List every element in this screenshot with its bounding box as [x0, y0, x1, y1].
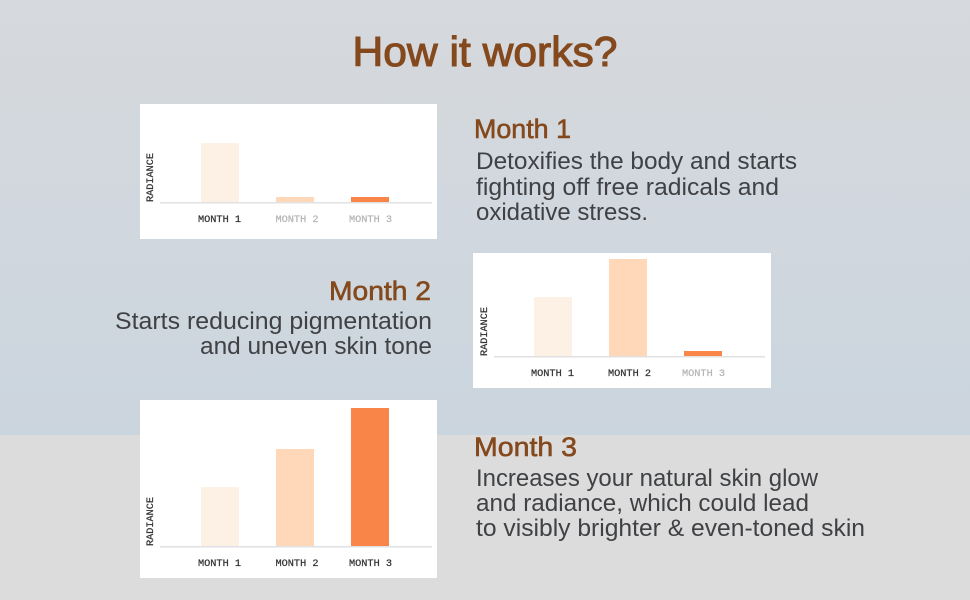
- month labels: [531, 369, 725, 380]
- month labels: MONTH 2: [608, 369, 651, 380]
- bars: [201, 143, 389, 202]
- description: to visibly brighter & even-toned skin: [476, 515, 865, 542]
- description: Increases your natural skin glow: [476, 465, 819, 492]
- month labels: [198, 215, 392, 226]
- month labels: MONTH 1: [531, 369, 574, 380]
- description: Starts reducing pigmentation: [115, 308, 432, 335]
- description: [476, 465, 865, 542]
- month labels: [198, 559, 392, 570]
- description: fighting off free radicals and: [476, 174, 779, 201]
- heading: Month 2: [329, 276, 431, 306]
- heading: Month 3: [474, 432, 577, 462]
- heading: Month 1: [474, 114, 571, 144]
- text block: month 2: [115, 276, 432, 360]
- axis label: RADIANCE: [146, 153, 157, 202]
- month labels: MONTH 1: [198, 215, 241, 226]
- month labels: MONTH 3: [682, 369, 725, 380]
- background: upper blue-grey band: [0, 0, 970, 435]
- text block: month 1: [474, 114, 797, 226]
- month labels: MONTH 3: [349, 559, 392, 570]
- description: [476, 148, 797, 226]
- month labels: MONTH 1: [198, 559, 241, 570]
- description: and uneven skin tone: [200, 333, 432, 360]
- description: oxidative stress.: [476, 199, 648, 226]
- panel: month 2 chart: [473, 253, 771, 388]
- axis label: RADIANCE: [146, 497, 157, 546]
- panel: month 1 chart: [140, 104, 437, 239]
- description: and radiance, which could lead: [476, 490, 809, 517]
- axis label: RADIANCE: [480, 307, 491, 356]
- description: Detoxifies the body and starts: [476, 148, 797, 175]
- bars: [534, 259, 722, 356]
- bars: [201, 408, 389, 546]
- month labels: MONTH 3: [349, 215, 392, 226]
- title: How it works?: [352, 28, 618, 75]
- month labels: MONTH 2: [276, 559, 318, 570]
- panel: month 3 chart: [140, 400, 437, 578]
- description: [115, 308, 432, 360]
- text block: month 3: [474, 432, 865, 542]
- month labels: MONTH 2: [276, 215, 318, 226]
- background: lower grey band: [0, 435, 970, 600]
